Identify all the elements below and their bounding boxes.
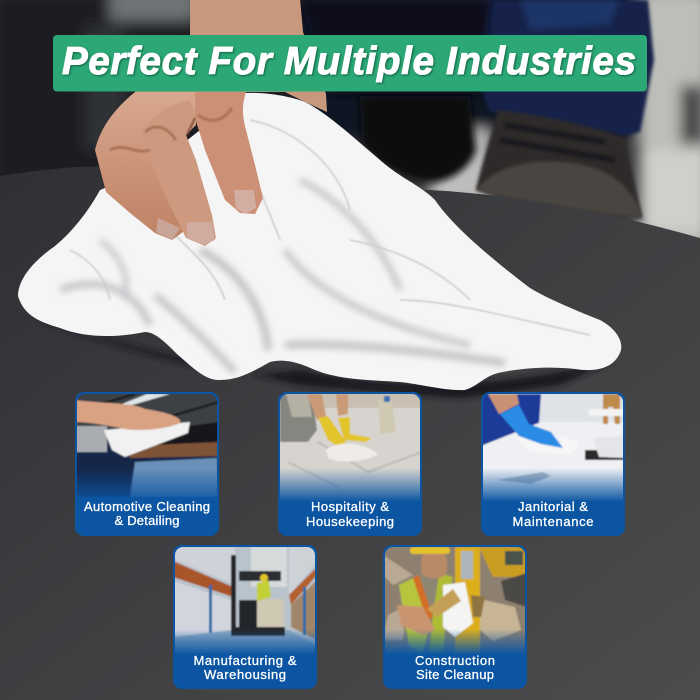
hand <box>95 0 327 246</box>
label <box>84 499 210 528</box>
card: manufacturing <box>173 545 317 689</box>
towel shadow <box>20 315 615 398</box>
card: hospitality <box>278 392 422 536</box>
card: janitorial <box>481 392 625 536</box>
label: Automotive Cleaning <box>84 499 210 514</box>
white towel <box>18 93 621 390</box>
label: & Detailing <box>114 513 180 528</box>
label: Manufacturing & <box>194 653 297 668</box>
title banner <box>53 35 647 92</box>
label <box>194 653 297 682</box>
mat <box>0 167 700 700</box>
label: Hospitality & <box>311 499 389 514</box>
title: Perfect For Multiple Industries <box>62 40 636 83</box>
label <box>415 653 495 682</box>
label: Maintenance <box>512 514 594 529</box>
label: Site Cleanup <box>416 667 494 682</box>
label: Warehousing <box>204 667 286 682</box>
label: Janitorial & <box>518 499 588 514</box>
label <box>306 499 394 529</box>
label <box>512 499 594 529</box>
card: construction <box>383 545 527 689</box>
label: Construction <box>415 653 495 668</box>
card: automotive <box>75 392 219 536</box>
label: Housekeeping <box>306 514 394 529</box>
